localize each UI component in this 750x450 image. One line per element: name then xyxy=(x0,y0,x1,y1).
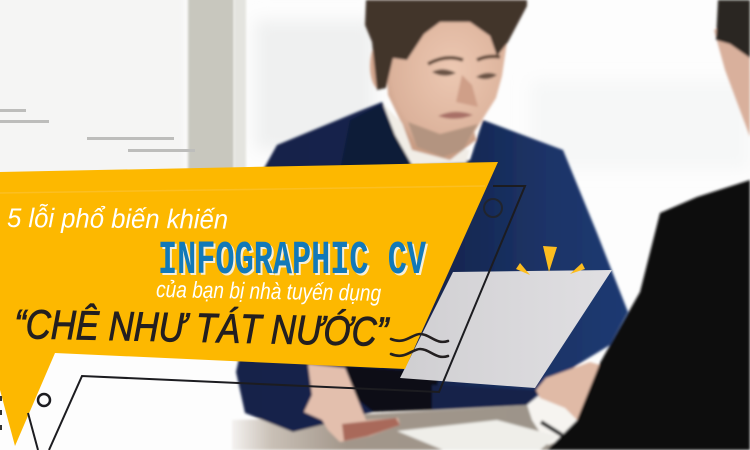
yellow accent ticks xyxy=(516,246,585,275)
nose shadow xyxy=(456,75,478,107)
headline: INFOGRAPHIC CV: INFOGRAPHIC CV xyxy=(158,235,427,288)
dark torso shadow xyxy=(345,366,440,412)
neck xyxy=(392,95,476,160)
foreground man: hair xyxy=(716,0,750,58)
table xyxy=(232,405,560,450)
face xyxy=(385,12,507,157)
quote line: “CHÊ NHƯ TÁT NƯỚC” xyxy=(14,301,391,355)
notebook xyxy=(397,420,557,450)
CV paper xyxy=(400,270,612,388)
headline shadow: INFOGRAPHIC CV xyxy=(160,237,429,290)
right hand xyxy=(536,362,600,420)
eyes xyxy=(432,69,497,79)
beard shadow xyxy=(408,122,478,157)
navy suit xyxy=(236,102,628,432)
frame circle on tail xyxy=(38,394,50,406)
jacket lapel shadow xyxy=(340,105,412,170)
foreground man: black suit xyxy=(547,180,750,450)
frame circle on banner edge xyxy=(484,199,502,217)
decorative grey dashes xyxy=(0,109,195,152)
black outline frame xyxy=(28,186,525,450)
banner highlight line xyxy=(0,186,485,193)
left edge dots xyxy=(0,396,2,430)
ear xyxy=(370,43,388,89)
pen xyxy=(541,422,562,435)
left hand xyxy=(304,364,400,442)
photo: interviewer in navy suit xyxy=(232,0,750,450)
yellow banner xyxy=(0,162,498,446)
white area behind the arm xyxy=(525,392,585,445)
squiggle lines xyxy=(391,334,448,357)
mouth xyxy=(438,112,473,119)
palm fingers xyxy=(342,418,400,441)
intro line: 5 lỗi phổ biến khiến xyxy=(7,202,228,235)
eyebrows xyxy=(428,56,500,64)
foreground man: neck xyxy=(714,10,750,137)
hair xyxy=(365,0,527,90)
shirt collar xyxy=(383,104,470,165)
subtitle line: của bạn bị nhà tuyến dụng xyxy=(156,276,381,306)
lower right torso shade xyxy=(432,385,540,410)
